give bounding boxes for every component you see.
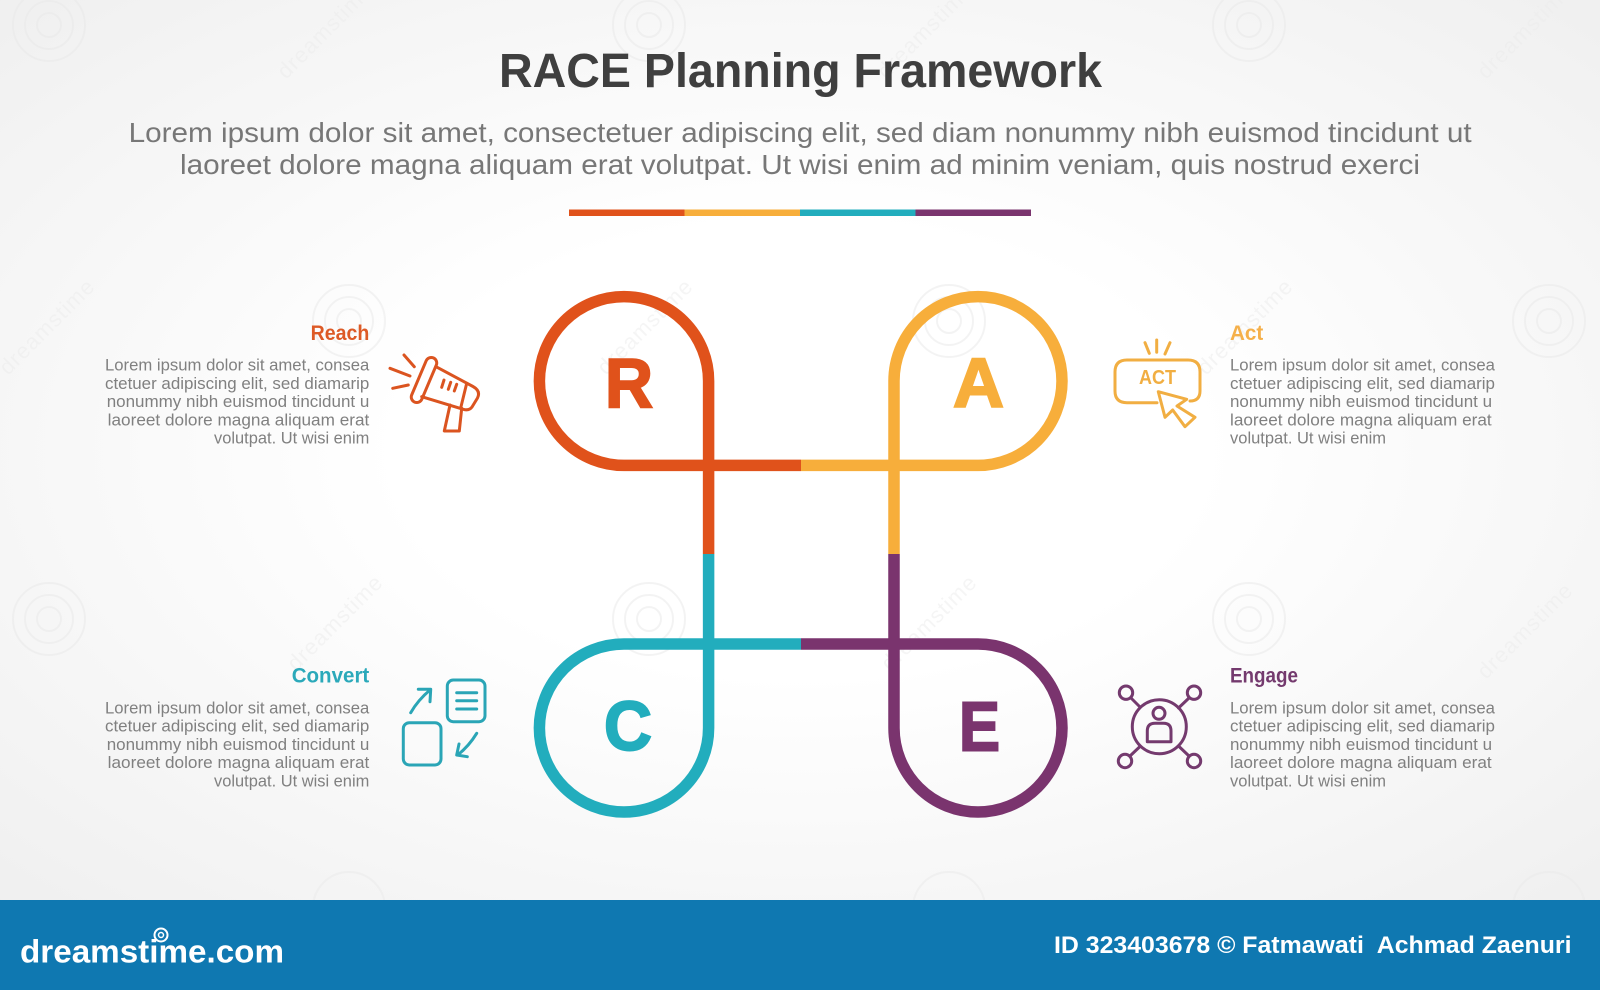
panel: Act text: volutpat. Ut wisi enim [1230, 428, 1386, 448]
subtitle text [129, 117, 1472, 180]
panel: Engage text: laoreet dolore magna aliquam erat [1230, 753, 1492, 772]
panel: Reach text: volutpat. Ut wisi enim [214, 428, 369, 448]
panel: Reach text [105, 322, 370, 448]
panel: Convert text: ctetuer adipiscing elit, sed diamarip [105, 717, 369, 736]
panel: Reach text: Reach [311, 322, 369, 345]
four-colour divider bar [569, 210, 1031, 216]
panel: Engage text: ctetuer adipiscing elit, sed diamarip [1230, 717, 1495, 736]
watermark pattern: dreamstime [282, 570, 388, 676]
title: RACE Planning Framework [499, 45, 1102, 98]
loop A [801, 297, 1062, 554]
panel: Convert text: laoreet dolore magna aliquam erat [108, 753, 370, 772]
panel: Engage text: nonummy nibh euismod tincidunt u [1230, 735, 1492, 754]
panel: Convert text: volutpat. Ut wisi enim [214, 771, 369, 790]
panel: Act text: Lorem ipsum dolor sit amet, consea [1230, 356, 1496, 375]
watermark pattern: dreamstime [1192, 274, 1298, 380]
panel: Reach text: nonummy nibh euismod tincidunt u [107, 392, 369, 411]
RACE diagram [539, 297, 1062, 812]
icon: convert documents [403, 680, 485, 765]
panel: Engage text: volutpat. Ut wisi enim [1230, 771, 1386, 790]
panel: Act text: nonummy nibh euismod tincidunt u [1230, 392, 1492, 411]
subtitle text: Lorem ipsum dolor sit amet, consectetuer adipiscing elit, sed diam nonummy nibh euismod tincidunt ut [129, 117, 1472, 148]
footer credit: ID 323403678 © Fatmawati Achmad Zaenuri [1054, 932, 1572, 959]
panel: Act text: ctetuer adipiscing elit, sed diamarip [1230, 374, 1495, 393]
letter C: C [604, 687, 652, 765]
icon: ACT button with cursor: ACT [1139, 367, 1176, 389]
panel: Convert text: Convert [292, 665, 369, 688]
panel: Engage text: Lorem ipsum dolor sit amet, consea [1230, 698, 1496, 718]
panel: Act text: laoreet dolore magna aliquam erat [1230, 410, 1492, 429]
subtitle text: laoreet dolore magna aliquam erat volutpat. Ut wisi enim ad minim veniam, quis nostrud exerci [180, 149, 1420, 180]
watermark pattern: dreamstime [876, 570, 982, 676]
icon: ACT button with cursor [1115, 340, 1200, 427]
icon: engaged network person [1118, 686, 1201, 768]
panel: Reach text: laoreet dolore magna aliquam erat [108, 410, 370, 429]
watermark pattern: dreamstime [592, 274, 698, 380]
panel: Act text [1230, 322, 1496, 448]
panel: Convert text: Lorem ipsum dolor sit amet, consea [105, 698, 370, 718]
watermark pattern: dreamstime [1472, 578, 1578, 684]
loop C [539, 554, 801, 812]
panel: Engage text [1230, 665, 1496, 790]
icon: megaphone [390, 355, 479, 431]
letter A: A [953, 344, 1004, 422]
panel: Convert text [105, 665, 370, 790]
panel: Reach text: ctetuer adipiscing elit, sed diamarip [105, 374, 369, 393]
footer logo: dreamstime.com [20, 934, 284, 970]
footer bar [0, 900, 1600, 990]
letter R: R [605, 344, 653, 422]
letter E: E [959, 688, 1000, 766]
panel: Act text: Act [1230, 322, 1263, 345]
loop R [539, 297, 801, 554]
panel: Reach text: Lorem ipsum dolor sit amet, consea [105, 356, 370, 375]
loop E [801, 554, 1062, 812]
panel: Engage text: Engage [1230, 665, 1298, 688]
panel: Convert text: nonummy nibh euismod tincidunt u [107, 735, 369, 754]
